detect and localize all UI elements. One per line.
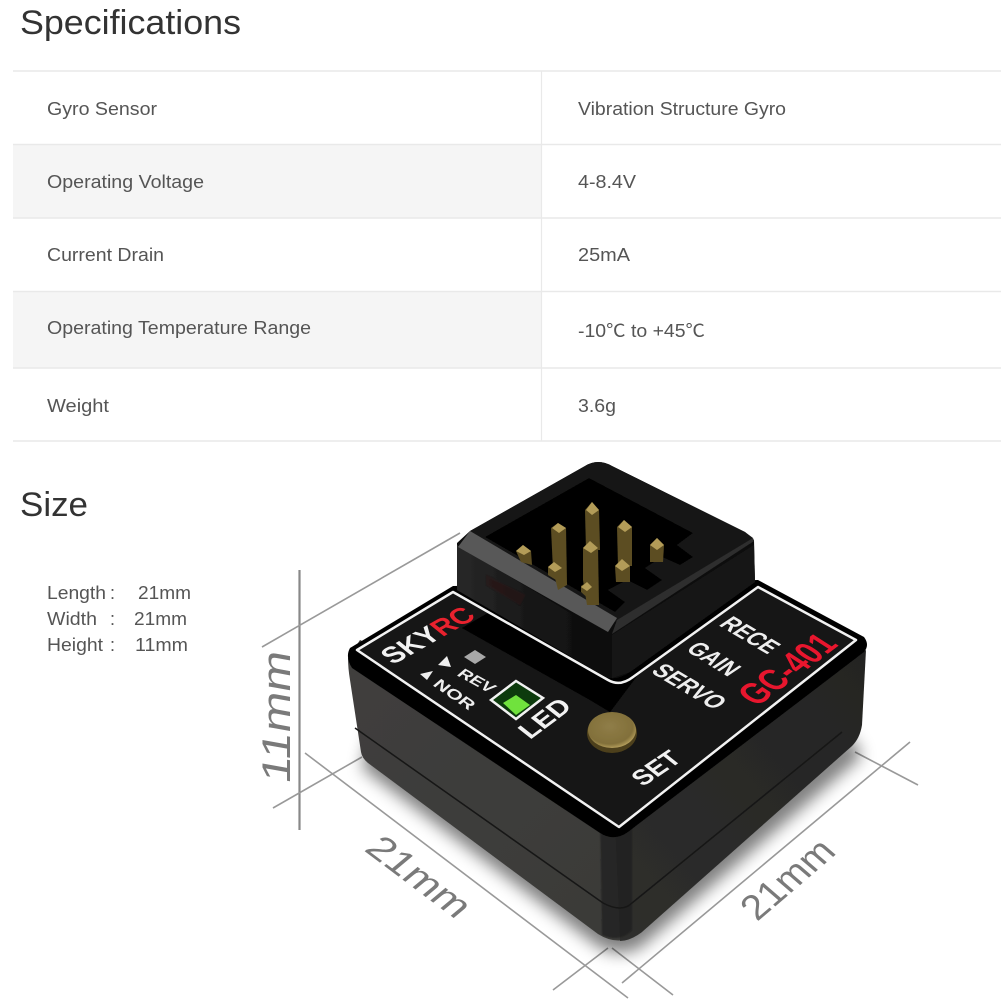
label: GAIN: GAIN xyxy=(680,638,746,680)
top face xyxy=(348,580,867,837)
row: gyro sensor xyxy=(47,99,786,119)
size list: Width xyxy=(47,609,97,629)
logo: SKYRC: SKYRC xyxy=(374,602,482,669)
dimension label: width 21mm: 21mm xyxy=(732,831,844,928)
pins xyxy=(516,502,664,605)
connector housing xyxy=(457,462,755,678)
size list: : xyxy=(110,583,115,603)
pin tips xyxy=(516,502,664,591)
LED window xyxy=(491,681,543,719)
left side of case xyxy=(348,640,642,941)
label: SET: SET xyxy=(624,745,688,791)
icon: up triangle xyxy=(438,656,451,667)
switch indicator xyxy=(464,650,486,664)
title: Specifications: Specifications xyxy=(20,4,241,42)
size list: : xyxy=(110,609,115,629)
row: gyro sensor: Gyro Sensor xyxy=(47,99,157,119)
row: operating voltage: 4-8.4V xyxy=(578,172,636,192)
size list xyxy=(47,583,191,655)
label: LED: LED xyxy=(513,694,578,744)
size list: 21mm xyxy=(134,609,187,629)
case groove xyxy=(355,728,842,908)
connector shadow on face xyxy=(462,606,640,712)
front right wall xyxy=(612,545,755,678)
row: current drain xyxy=(47,245,630,265)
white outline on face xyxy=(357,587,856,827)
row: weight: 3.6g xyxy=(578,396,616,416)
dimension label: height 11mm: 11mm xyxy=(253,646,299,787)
size list: Height xyxy=(47,635,103,655)
corner shading xyxy=(600,815,632,938)
size list: 11mm xyxy=(135,635,188,655)
SET button xyxy=(587,712,637,753)
row: current drain: Current Drain xyxy=(47,245,164,265)
icon: down triangle xyxy=(420,671,433,680)
row: operating temperature range xyxy=(47,318,705,341)
device: GC-401 gyro xyxy=(348,462,867,953)
label: SERVO: SERVO xyxy=(645,660,732,714)
label: REV: REV xyxy=(453,666,501,696)
rim top xyxy=(470,462,753,622)
row: operating temperature range: -10℃ to +45℃ xyxy=(578,321,705,341)
heading: Size: Size xyxy=(20,486,88,524)
row: weight: Weight xyxy=(47,396,109,416)
right side of case xyxy=(614,650,866,941)
model name: GC-401: GC-401 xyxy=(729,627,847,712)
red reflection xyxy=(486,575,525,605)
specifications table xyxy=(13,71,1001,441)
dimension label: length 21mm: 21mm xyxy=(356,829,481,925)
size list: 21mm xyxy=(138,583,191,603)
size list: Length xyxy=(47,583,106,603)
row: operating voltage: Operating Voltage xyxy=(47,172,204,192)
label: NOR: NOR xyxy=(429,676,479,713)
socket opening xyxy=(485,478,693,612)
size list: : xyxy=(110,635,115,655)
row: operating voltage xyxy=(47,172,636,192)
dimension lines xyxy=(262,533,918,998)
label: RECE: RECE xyxy=(713,613,786,658)
rim highlight left xyxy=(458,531,617,632)
row: gyro sensor: Vibration Structure Gyro xyxy=(578,99,786,119)
row: current drain: 25mA xyxy=(578,245,630,265)
row: operating temperature range: Operating Temperature Range xyxy=(47,318,311,338)
drop shadow xyxy=(362,735,862,953)
front left wall xyxy=(457,545,612,678)
row: weight xyxy=(47,396,616,416)
